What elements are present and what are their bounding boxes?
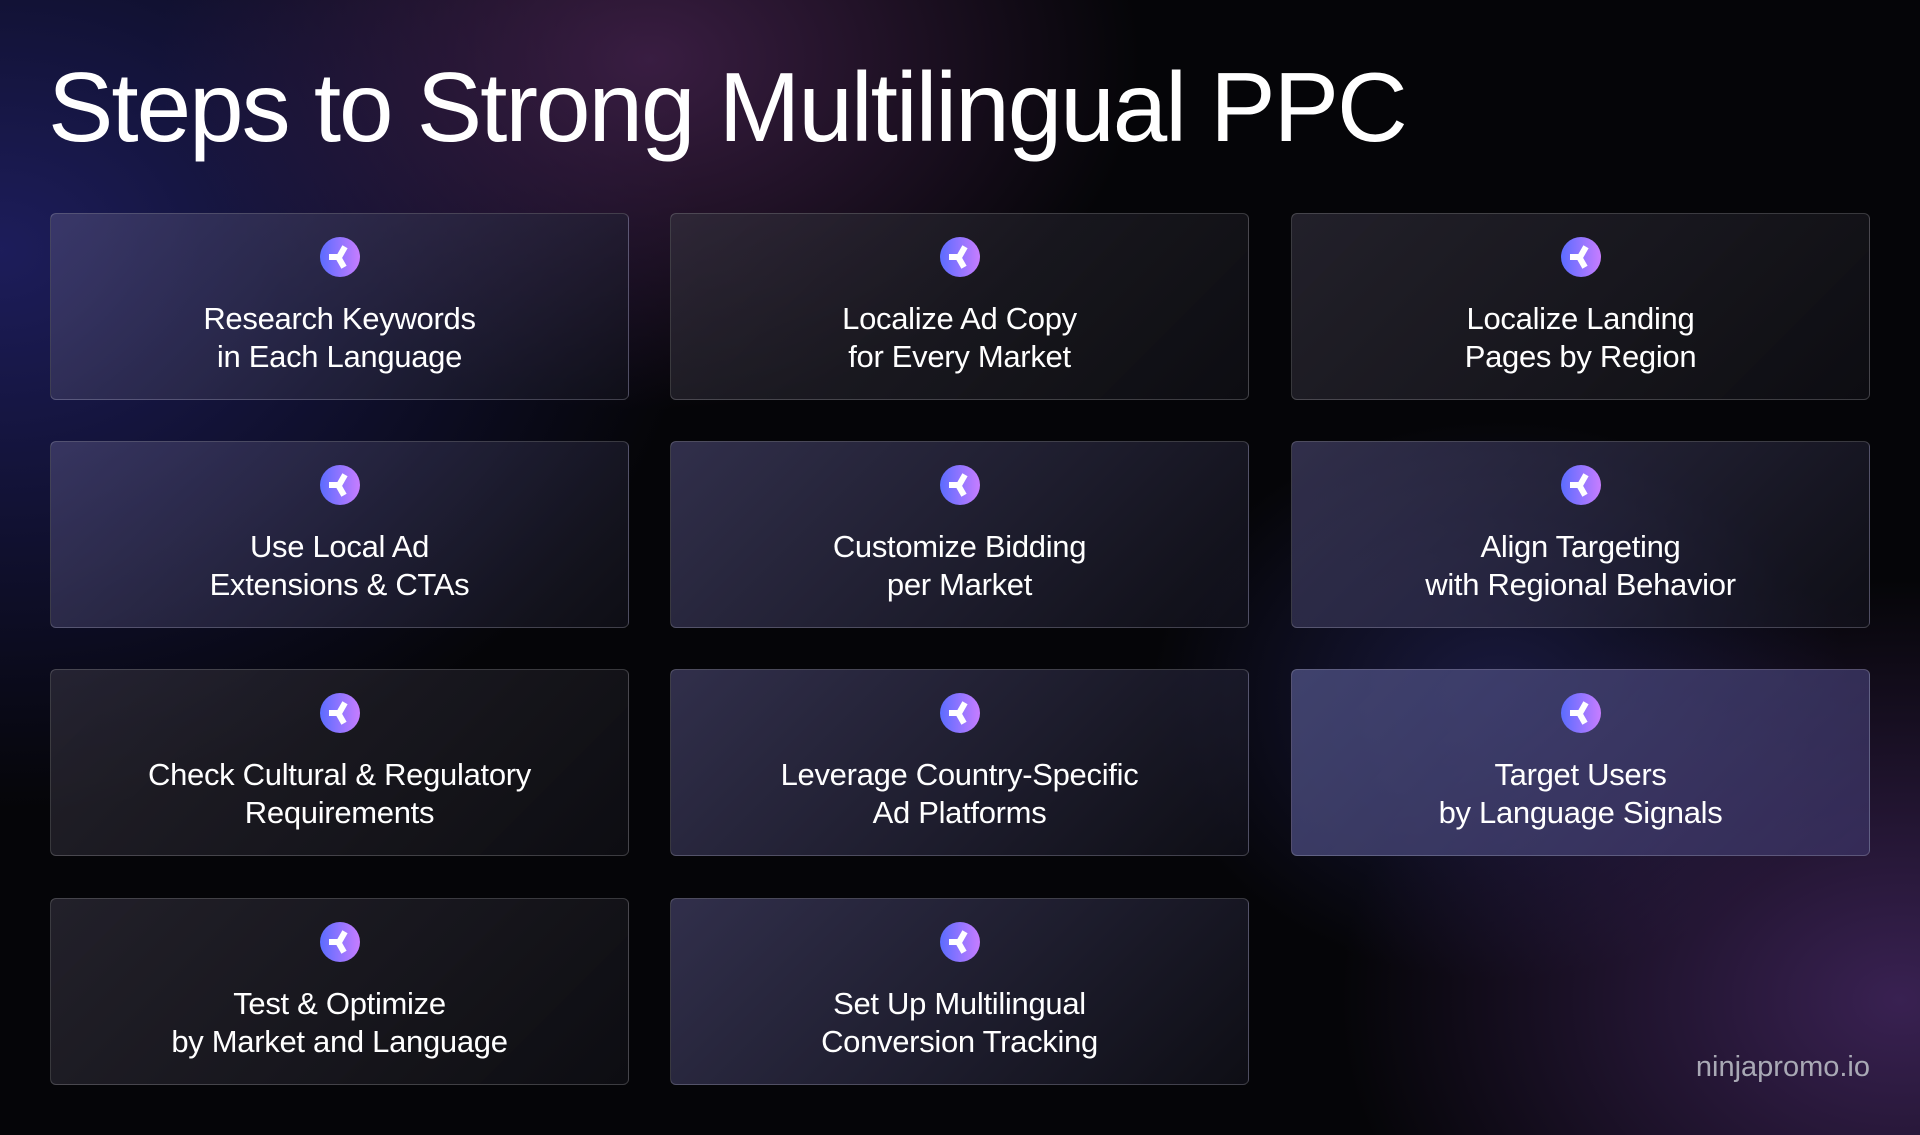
card: research keywords — [50, 213, 629, 400]
icon — [320, 465, 360, 505]
card: country-specific platforms: Ad Platforms — [873, 795, 1046, 830]
icon — [940, 237, 980, 277]
card: customize bidding — [670, 441, 1249, 628]
card: language signals: by Language Signals — [1439, 795, 1722, 830]
footer brand: ninjapromo.io — [1696, 1051, 1870, 1083]
icon — [1561, 237, 1601, 277]
card: align targeting: with Regional Behavior — [1425, 567, 1736, 602]
card: customize bidding: per Market — [887, 567, 1032, 602]
card: localize ad copy: Localize Ad Copy — [842, 301, 1077, 336]
icon — [1561, 465, 1601, 505]
card: localize ad copy — [670, 213, 1249, 400]
card: localize landing pages — [1291, 213, 1870, 400]
card: local ad extensions — [50, 441, 629, 628]
card: language signals: Target Users — [1494, 757, 1667, 792]
card: local ad extensions: Use Local Ad — [250, 529, 429, 564]
card: localize landing pages: Pages by Region — [1465, 339, 1696, 374]
card: cultural regulatory: Requirements — [245, 795, 434, 830]
card: research keywords: Research Keywords — [203, 301, 476, 336]
card: language signals — [1291, 669, 1870, 856]
icon — [940, 465, 980, 505]
card: test optimize: by Market and Language — [171, 1024, 508, 1059]
card: align targeting: Align Targeting — [1480, 529, 1680, 564]
card: localize ad copy: for Every Market — [848, 339, 1071, 374]
card: country-specific platforms — [670, 669, 1249, 856]
card: conversion tracking: Conversion Tracking — [821, 1024, 1098, 1059]
card: conversion tracking — [670, 898, 1249, 1085]
card: local ad extensions: Extensions & CTAs — [210, 567, 469, 602]
card: localize landing pages: Localize Landing — [1467, 301, 1694, 336]
card: customize bidding: Customize Bidding — [833, 529, 1086, 564]
card: align targeting — [1291, 441, 1870, 628]
icon — [940, 922, 980, 962]
title: Steps to Strong Multilingual PPC — [48, 52, 1406, 162]
icon — [940, 693, 980, 733]
icon — [1561, 693, 1601, 733]
icon — [320, 693, 360, 733]
icon — [320, 237, 360, 277]
card: cultural regulatory — [50, 669, 629, 856]
card: cultural regulatory: Check Cultural & Regulatory — [148, 757, 531, 792]
card: research keywords: in Each Language — [217, 339, 462, 374]
card: test optimize: Test & Optimize — [233, 986, 446, 1021]
card: conversion tracking: Set Up Multilingual — [833, 986, 1086, 1021]
icon — [320, 922, 360, 962]
card: country-specific platforms: Leverage Country-Specific — [781, 757, 1138, 792]
card: test optimize — [50, 898, 629, 1085]
